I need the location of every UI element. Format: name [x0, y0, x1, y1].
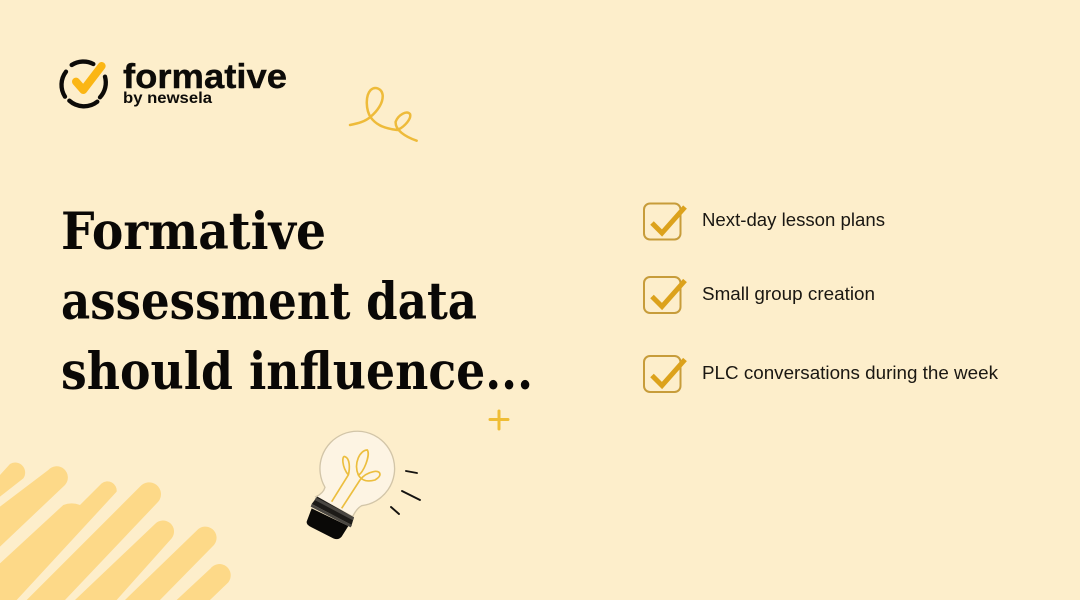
title: [61, 202, 533, 402]
item: next-day lesson plans: Next-day lesson plans: [702, 210, 885, 230]
item: next-day lesson plans: [644, 204, 885, 240]
decorative stripes: [0, 463, 231, 600]
icon: light rays: [391, 471, 420, 514]
logo: [62, 58, 287, 107]
icon: logo ring and check: [62, 62, 106, 106]
item: PLC conversations: PLC conversations during the week: [702, 363, 999, 383]
item: small group creation: [644, 277, 875, 313]
checklist: [644, 204, 999, 392]
logo wordmark: formative: [123, 58, 287, 96]
item: small group creation: Small group creation: [702, 284, 875, 304]
icon: light bulb: [307, 431, 395, 539]
title: assessment data: [61, 272, 477, 332]
title: should influence...: [61, 342, 533, 402]
title: Formative: [61, 202, 326, 262]
squiggle: [350, 88, 417, 141]
logo tagline: by newsela: [123, 90, 212, 107]
plus sign: [490, 411, 508, 429]
item: PLC conversations: [644, 356, 999, 392]
